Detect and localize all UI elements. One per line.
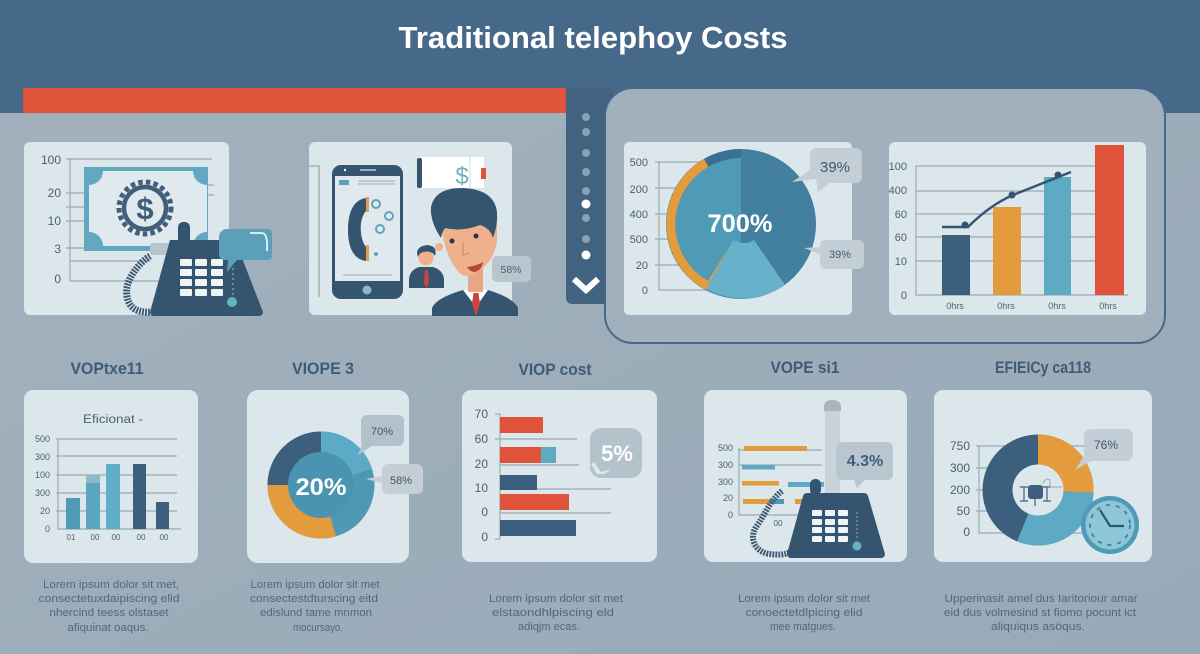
- callout: 4.3%: 4.3%: [847, 453, 883, 470]
- axis labels: 400: [889, 185, 907, 197]
- axis labels: 10: [895, 256, 907, 268]
- axis labels: 0: [728, 510, 733, 520]
- axis labels: [475, 407, 488, 544]
- text: column 1 description: consectetuxdaipiscing elid: [38, 593, 180, 605]
- bars: [742, 446, 824, 504]
- text: column 4 description: Lorem ipsum dolor sit met: [738, 593, 870, 605]
- chart title: Eficionat -: [83, 414, 143, 426]
- category label: 00: [774, 519, 783, 528]
- axis labels: 20: [48, 186, 61, 200]
- callout: 39%: [792, 148, 862, 192]
- text: column 1 description: afiquinat oaqus.: [68, 622, 148, 634]
- icon: smartphone: [332, 165, 403, 299]
- text: column 3 description: adiqjm ecas.: [518, 621, 580, 633]
- callout: 58%: [492, 256, 531, 282]
- axis labels: 300: [950, 461, 970, 475]
- axis labels: 20: [475, 457, 488, 471]
- pie value: 700%: [708, 210, 772, 238]
- icon: banknote: [84, 167, 208, 251]
- axis labels: [41, 153, 61, 286]
- bars: [500, 417, 576, 536]
- axis labels: 0: [481, 530, 488, 544]
- axis labels: 60: [475, 432, 488, 446]
- pole: [824, 400, 841, 494]
- axis labels: 500: [35, 434, 50, 444]
- trend line: [942, 172, 1071, 228]
- callout: 39% small: [804, 240, 864, 269]
- heading: column 2: VIOPE 3: [292, 359, 354, 378]
- axis labels: [950, 439, 970, 539]
- callout: 58%: 58%: [500, 264, 522, 276]
- axis labels: 500: [718, 443, 733, 453]
- category labels: [946, 301, 1117, 311]
- category labels: 0hrs: [997, 301, 1015, 311]
- category labels: 00: [137, 533, 146, 542]
- text: column 1 description: nhercind teess olstaset: [50, 607, 168, 619]
- header band: [0, 0, 1200, 113]
- panel: bar and line chart: [889, 142, 1146, 315]
- icon: clock: [1081, 496, 1139, 554]
- text: column 2 description: mocursayo.: [293, 622, 343, 634]
- callout: 70%: [358, 415, 404, 455]
- text: column 3 description: elstaondhlpiscing eld: [492, 607, 614, 619]
- text: column 4 description: conoectetdlpicing elid: [746, 607, 862, 619]
- panel: donut 20%: [247, 390, 423, 563]
- icon: monitor: [1020, 479, 1062, 506]
- icon: desk telephone: [127, 222, 263, 316]
- axis labels: 200: [630, 184, 648, 196]
- donut: [982, 434, 1094, 546]
- axis labels: 70: [475, 407, 488, 421]
- callout: 58%: 58%: [390, 475, 412, 487]
- callout: 58%: [366, 464, 423, 494]
- category labels: 0hrs: [1099, 301, 1117, 311]
- panel: horizontal bars: [462, 390, 657, 562]
- text: column 4 description: mee matgues.: [770, 621, 836, 633]
- panel: donut with clock: [934, 390, 1152, 562]
- panel: telephone with bars: [704, 390, 907, 562]
- text: column 2 description: consectestdturscing eitd: [250, 593, 378, 605]
- heading: column 5: EFIEICy ca118: [995, 358, 1091, 377]
- text: column 5 description: [944, 593, 1138, 633]
- text: column 5 description: aliquiqus asöqus.: [991, 621, 1085, 633]
- text: column 2 description: Lorem ipsum dolor sit met: [250, 579, 380, 591]
- icon: businessman: [431, 188, 518, 316]
- text: column 5 description: Upperinasit amel dus Iaritoriour amar: [944, 593, 1138, 605]
- icon: small businessman: [409, 245, 444, 288]
- axis labels: 20: [636, 260, 648, 272]
- callout: 39%: 39%: [820, 159, 850, 176]
- pie: [666, 149, 816, 299]
- axis labels: 300: [718, 460, 733, 470]
- heading: column 3: VIOP cost: [518, 360, 592, 379]
- axis labels: 500: [630, 234, 648, 246]
- axis labels: 0: [901, 290, 907, 302]
- callout: 5%: [590, 428, 642, 478]
- icon: banknote: $: [136, 191, 154, 226]
- text: column 3 description: Lorem ipsum dolor sit met: [489, 593, 623, 605]
- donut value: 20%: [296, 474, 346, 501]
- axis labels: 200: [950, 483, 970, 497]
- axis labels: 300: [35, 488, 50, 498]
- axis labels: 0: [481, 505, 488, 519]
- navigation strip: [566, 88, 612, 304]
- axis labels: 60: [895, 232, 907, 244]
- category labels: 01: [67, 533, 76, 542]
- axis labels: 3: [54, 242, 61, 256]
- axis labels: [630, 157, 648, 297]
- panel: mobile phone and person: [309, 142, 531, 316]
- axis labels: [889, 161, 907, 302]
- text: column 1 description: [38, 579, 180, 634]
- axis labels: 100: [35, 470, 50, 480]
- axis labels: 100: [889, 161, 907, 173]
- text: column 2 description: [250, 579, 380, 634]
- axis labels: 500: [630, 157, 648, 169]
- panel: pie chart: [624, 142, 864, 315]
- category labels: 00: [91, 533, 100, 542]
- axis labels: 50: [957, 504, 970, 518]
- icon: dollar battery: $: [455, 163, 469, 190]
- axis labels: 300: [718, 477, 733, 487]
- axis labels: 20: [40, 506, 50, 516]
- category labels: [67, 533, 169, 542]
- text: column 4 description: [738, 593, 870, 633]
- axis labels: 10: [475, 481, 488, 495]
- icon: speech bubble: [219, 229, 272, 272]
- panel: money and telephone: [24, 142, 272, 316]
- axis labels: 60: [895, 209, 907, 221]
- heading: column 4: VOPE si1: [770, 358, 840, 377]
- callout: 76%: [1075, 429, 1133, 470]
- callout: 76%: 76%: [1094, 438, 1118, 452]
- callout: 5%: 5%: [601, 441, 633, 466]
- text: column 5 description: eid dus volmesind st fiomo pocunt ict: [944, 607, 1136, 619]
- category labels: 00: [160, 533, 169, 542]
- callout: 39% small: 39%: [829, 249, 851, 261]
- bars: [66, 464, 169, 529]
- text: column 3 description: [489, 593, 623, 633]
- text: column 1 description: Lorem ipsum dolor sit met,: [43, 579, 179, 591]
- category labels: 00: [112, 533, 121, 542]
- text: column 2 description: edislund tame mnmon: [260, 607, 372, 619]
- axis labels: 20: [723, 493, 733, 503]
- donut: [267, 432, 374, 539]
- category labels: 0hrs: [1048, 301, 1066, 311]
- heading: column 1: VOPtxe11: [70, 359, 144, 378]
- category labels: 0hrs: [946, 301, 964, 311]
- callout: 70%: 70%: [371, 426, 393, 438]
- axis labels: [35, 434, 50, 534]
- title: Traditional telephoy Costs: [398, 20, 788, 55]
- axis labels: 300: [35, 452, 50, 462]
- bars: [942, 145, 1124, 295]
- icon: dollar battery: [417, 157, 486, 190]
- red accent bar: [23, 88, 566, 113]
- axis labels: [718, 443, 733, 520]
- axis labels: 0: [54, 272, 61, 286]
- callout: 4.3%: [836, 442, 893, 488]
- icon: desk telephone: [753, 479, 885, 558]
- axis labels: 10: [48, 214, 61, 228]
- panel: efficiency bars: [24, 390, 198, 563]
- axis labels: 0: [45, 524, 50, 534]
- axis labels: 100: [41, 153, 61, 167]
- axis labels: 400: [630, 209, 648, 221]
- axis labels: 750: [950, 439, 970, 453]
- axis labels: 0: [642, 285, 648, 297]
- highlighted panel: [605, 88, 1165, 343]
- axis labels: 0: [963, 525, 970, 539]
